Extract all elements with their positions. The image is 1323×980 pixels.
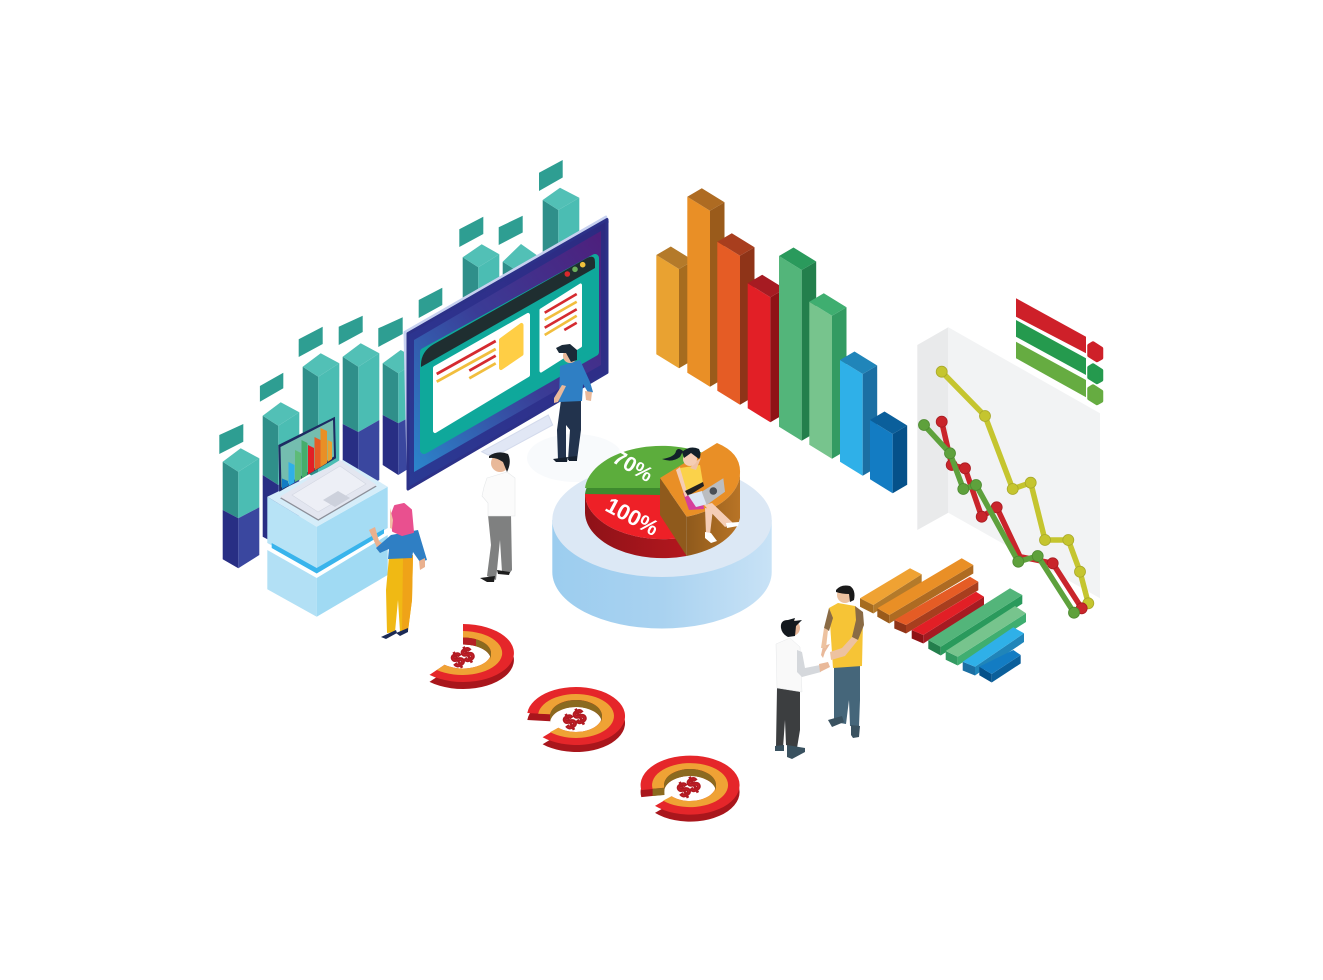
dollar symbols: $$ [674, 773, 704, 803]
column 2 [260, 373, 299, 545]
floor shadow [527, 434, 623, 482]
ring chart 1 [430, 624, 514, 689]
label 70%: 70% [609, 446, 657, 487]
bar 6 [809, 293, 846, 459]
column 7 [459, 217, 499, 320]
panel: laptop on blue boxes [267, 417, 388, 617]
window buttons [564, 262, 586, 277]
panel: monitor [404, 216, 608, 489]
panel: pie chart on platform [552, 443, 772, 628]
floor bar 8 [979, 650, 1021, 682]
floor bar 5 [928, 588, 1022, 656]
bar 5 [779, 248, 816, 441]
floating slab [419, 288, 442, 318]
pie slice: orange [660, 443, 740, 556]
content card left [435, 315, 528, 431]
green line series [918, 420, 1080, 618]
floor bar 7 [963, 627, 1024, 676]
lower box [267, 535, 388, 617]
laptop [278, 417, 377, 521]
bar 3 [717, 233, 754, 405]
pie slice: green 70% [585, 446, 703, 501]
column 5 [378, 317, 419, 475]
floor bar 4 [912, 592, 984, 644]
column 8 [499, 216, 538, 300]
monitor stand [482, 415, 553, 455]
content card right [541, 285, 580, 371]
panel: column chart [656, 188, 907, 493]
yellow line series [936, 366, 1094, 609]
panel: floor bar chart [860, 558, 1026, 682]
bar 2 [687, 188, 724, 387]
bar 8 [870, 412, 907, 493]
floor bar 3 [894, 577, 978, 634]
floor bar 2 [877, 558, 973, 624]
monitor screen [424, 258, 595, 450]
floor bar 6 [946, 606, 1026, 666]
column 4 [339, 316, 379, 490]
legend [1016, 298, 1102, 404]
platform [552, 463, 772, 628]
dollar symbols: $$ [448, 643, 478, 673]
ring chart 3 [641, 756, 740, 822]
window title bar [421, 257, 595, 367]
column 3 [299, 327, 339, 480]
panel: teal data columns [219, 160, 579, 568]
column 1 [219, 424, 259, 568]
red line series [936, 416, 1087, 614]
ring chart 2 [527, 687, 625, 752]
person: man in white shirt [480, 452, 515, 582]
person: man in yellow shirt [821, 586, 864, 738]
bar 7 [840, 352, 877, 476]
bar 4 [748, 275, 785, 422]
panel: line chart wall [917, 298, 1102, 618]
person: man in white shirt shaking hands [775, 618, 830, 759]
bar 1 [656, 246, 694, 368]
upper box [267, 460, 388, 570]
dollar symbols: $$ [560, 705, 590, 735]
stripe between boxes [272, 529, 384, 574]
pie slice: red 100% [585, 492, 686, 558]
monitor bezel [404, 216, 608, 489]
label 100%: 100% [602, 492, 663, 541]
floor bar 1 [860, 568, 922, 614]
column 9 [539, 160, 579, 262]
person: man in blue shirt [553, 344, 593, 462]
person: woman in hijab [369, 504, 427, 639]
laptop mini chart [282, 428, 332, 489]
person: woman with laptop [662, 448, 739, 543]
